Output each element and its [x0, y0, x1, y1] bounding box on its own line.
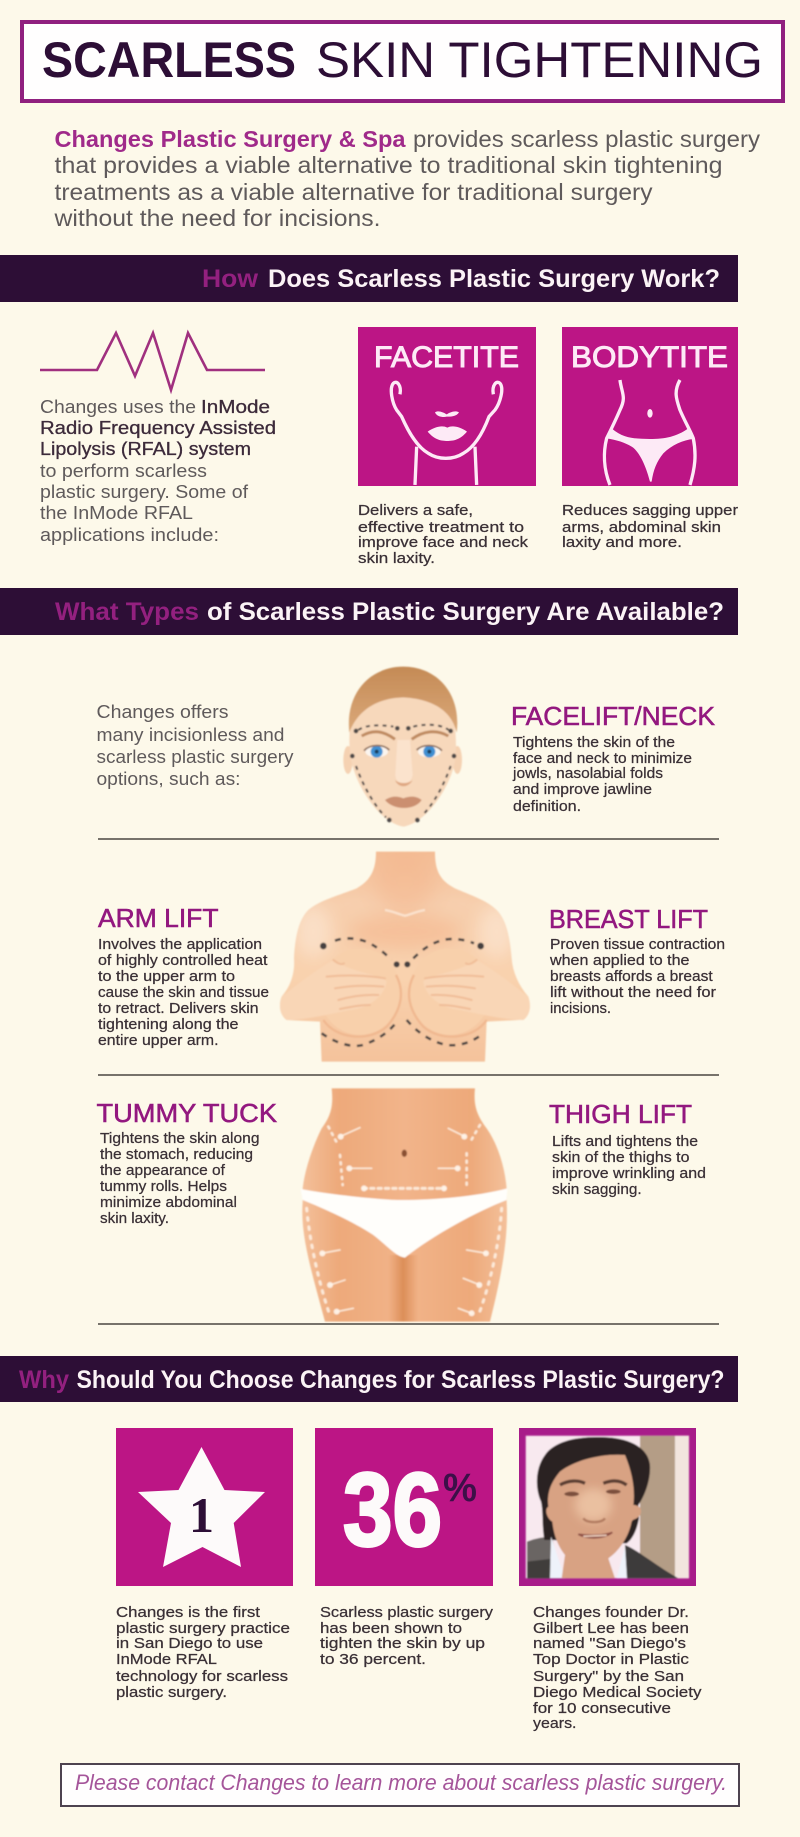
caption: founder: Surgery" by the San: [533, 1668, 684, 1685]
caption: BodyTite: arms, abdominal skin: [562, 519, 721, 536]
text block: thigh lift: skin of the thighs to: [552, 1149, 690, 1166]
title: SKIN TIGHTENING: [316, 32, 763, 88]
icon: torso outline: [604, 380, 695, 485]
text block: facelift: Tightens the skin of the: [513, 734, 675, 751]
text block: facelift: face and neck to minimize: [513, 750, 692, 767]
heading: facelift: FACELIFT/NECK: [511, 703, 715, 731]
section heading: how does it work: [0, 255, 738, 302]
title: [22, 22, 783, 101]
intro text block: Changes Plastic Surgery & Spa: [54, 126, 406, 152]
caption: first practice: InMode RFAL: [116, 1651, 217, 1668]
text block: arm lift: of highly controlled heat: [98, 952, 268, 969]
text block: InMode RFAL: Changes uses the: [40, 396, 196, 417]
section heading: how does it work: How: [202, 265, 259, 293]
text block: InMode RFAL: Radio Frequency Assisted: [40, 417, 276, 438]
photo: Dr. Gilbert Lee: [519, 1428, 696, 1586]
intro text block: [53, 126, 760, 231]
illustration: chest with treatment lines: [280, 852, 530, 1062]
text block: arm lift: to retract. Delivers skin: [98, 1000, 258, 1017]
caption: first practice: in San Diego to use: [116, 1635, 263, 1652]
callout: contact: [61, 1764, 739, 1806]
intro text block: that provides a viable alternative to traditional skin tightening: [54, 152, 722, 178]
text block: breast lift: incisions.: [550, 1000, 611, 1017]
panel: BodyTite: BODYTITE: [571, 341, 728, 374]
text block: breast lift: [549, 936, 725, 1017]
text block: breast lift: Proven tissue contraction: [550, 936, 725, 953]
section heading: types: What Types: [55, 598, 199, 626]
caption: first practice: plastic surgery practice: [116, 1620, 290, 1637]
icon: face outline: [391, 382, 502, 485]
text block: tummy tuck: tummy rolls. Helps: [100, 1178, 227, 1195]
caption: 36 percent: to 36 percent.: [320, 1651, 426, 1668]
text block: thigh lift: Lifts and tightens the: [552, 1133, 698, 1150]
caption: 36 percent: tighten the skin by up: [320, 1635, 485, 1652]
caption: founder: named "San Diego's: [533, 1635, 686, 1652]
icon: star: [138, 1447, 265, 1567]
intro text block: without the need for incisions.: [53, 205, 381, 231]
section heading: why choose: Why: [19, 1366, 69, 1394]
text block: tummy tuck: [100, 1130, 260, 1227]
text block: InMode RFAL: plastic surgery. Some of: [40, 481, 249, 502]
text block: arm lift: Involves the application: [98, 936, 262, 953]
caption: FaceTite: improve face and neck: [358, 534, 529, 551]
text block: breast lift: breasts affords a breast: [550, 968, 714, 985]
caption: BodyTite: [562, 502, 738, 551]
text block: arm lift: cause the skin and tissue: [98, 984, 269, 1001]
caption: FaceTite: Delivers a safe,: [358, 502, 473, 519]
text block: facelift: and improve jawline: [513, 781, 652, 798]
text block: thigh lift: improve wrinkling and: [552, 1165, 706, 1182]
caption: FaceTite: skin laxity.: [358, 550, 435, 567]
illustration: abdomen and thighs with treatment lines: [301, 1088, 507, 1322]
intro text block: provides scarless plastic surgery: [413, 126, 760, 152]
caption: founder: Diego Medical Society: [533, 1684, 702, 1701]
text block: tummy tuck: minimize abdominal: [100, 1194, 237, 1211]
intro text block: treatments as a viable alternative for traditional surgery: [54, 179, 653, 205]
caption: founder: Gilbert Lee has been: [533, 1620, 689, 1637]
heading: tummy tuck: TUMMY TUCK: [96, 1100, 277, 1128]
text block: options intro: many incisionless and: [96, 724, 284, 745]
text block: arm lift: entire upper arm.: [98, 1032, 218, 1049]
heading: breast lift: BREAST LIFT: [549, 906, 708, 934]
text block: breast lift: lift without the need for: [550, 984, 716, 1001]
caption: founder: Top Doctor in Plastic: [533, 1651, 690, 1668]
text block: InMode RFAL: applications include:: [40, 524, 219, 545]
caption: first practice: Changes is the first: [116, 1604, 261, 1621]
section heading: types: of Scarless Plastic Surgery Are Available?: [207, 598, 724, 626]
panel: FaceTite: FACETITE: [374, 341, 519, 374]
caption: FaceTite: [358, 502, 529, 567]
icon: radio frequency wave: [40, 333, 265, 390]
caption: first practice: plastic surgery.: [116, 1684, 227, 1701]
section heading: types: [0, 588, 738, 635]
text block: facelift: jowls, nasolabial folds: [512, 765, 663, 782]
caption: BodyTite: Reduces sagging upper: [562, 502, 738, 519]
text block: InMode RFAL: Lipolysis (RFAL) system: [40, 438, 251, 459]
text block: InMode RFAL: InMode: [201, 396, 270, 417]
text block: arm lift: [98, 936, 269, 1049]
heading: arm lift: ARM LIFT: [98, 905, 218, 933]
caption: 36 percent: has been shown to: [320, 1620, 462, 1637]
panel: 36 percent: 36: [343, 1452, 442, 1568]
section heading: why choose: [0, 1356, 738, 1402]
text block: options intro: Changes offers: [96, 701, 228, 722]
text block: breast lift: when applied to the: [549, 952, 690, 969]
caption: founder: years.: [533, 1715, 576, 1732]
text block: tummy tuck: the appearance of: [100, 1162, 226, 1179]
text block: options intro: options, such as:: [96, 768, 240, 789]
heading: thigh lift: THIGH LIFT: [549, 1101, 692, 1129]
text block: InMode RFAL: to perform scarless: [40, 460, 207, 481]
text block: tummy tuck: skin laxity.: [100, 1210, 169, 1227]
section heading: how does it work: Does Scarless Plastic Surgery Work?: [268, 265, 720, 293]
panel: number one star: 1: [189, 1487, 214, 1543]
text block: options intro: scarless plastic surgery: [96, 746, 294, 767]
text block: options intro: [96, 701, 294, 789]
caption: founder: Changes founder Dr.: [533, 1604, 689, 1621]
text block: facelift: definition.: [513, 798, 581, 815]
text block: tummy tuck: Tightens the skin along: [100, 1130, 260, 1147]
caption: BodyTite: laxity and more.: [562, 534, 682, 551]
caption: 36 percent: [320, 1604, 494, 1668]
caption: founder: for 10 consecutive: [533, 1700, 671, 1717]
caption: 36 percent: Scarless plastic surgery: [320, 1604, 494, 1621]
text block: InMode RFAL: [40, 396, 276, 545]
text block: arm lift: tightening along the: [98, 1016, 238, 1033]
text block: facelift: [512, 734, 692, 815]
panel: 36 percent: %: [443, 1466, 477, 1510]
callout: contact: Please contact Changes to learn more about scarless plastic surgery.: [75, 1770, 727, 1795]
caption: first practice: technology for scarless: [116, 1668, 288, 1685]
panel: BodyTite: [562, 327, 738, 486]
caption: founder: [533, 1604, 702, 1732]
section heading: why choose: Should You Choose Changes for Scarless Plastic Surgery?: [76, 1366, 724, 1394]
panel: FaceTite: [358, 327, 536, 486]
illustration: face with treatment lines: [343, 667, 462, 827]
text block: thigh lift: [552, 1133, 706, 1198]
title: SCARLESS: [42, 32, 296, 88]
panel: number one star: [116, 1428, 293, 1586]
text block: tummy tuck: the stomach, reducing: [100, 1146, 253, 1163]
text block: arm lift: to the upper arm to: [98, 968, 235, 985]
text block: InMode RFAL: the InMode RFAL: [40, 502, 193, 523]
panel: 36 percent: [315, 1428, 493, 1586]
caption: FaceTite: effective treatment to: [358, 519, 524, 536]
text block: thigh lift: skin sagging.: [552, 1181, 642, 1198]
caption: first practice: [116, 1604, 290, 1701]
